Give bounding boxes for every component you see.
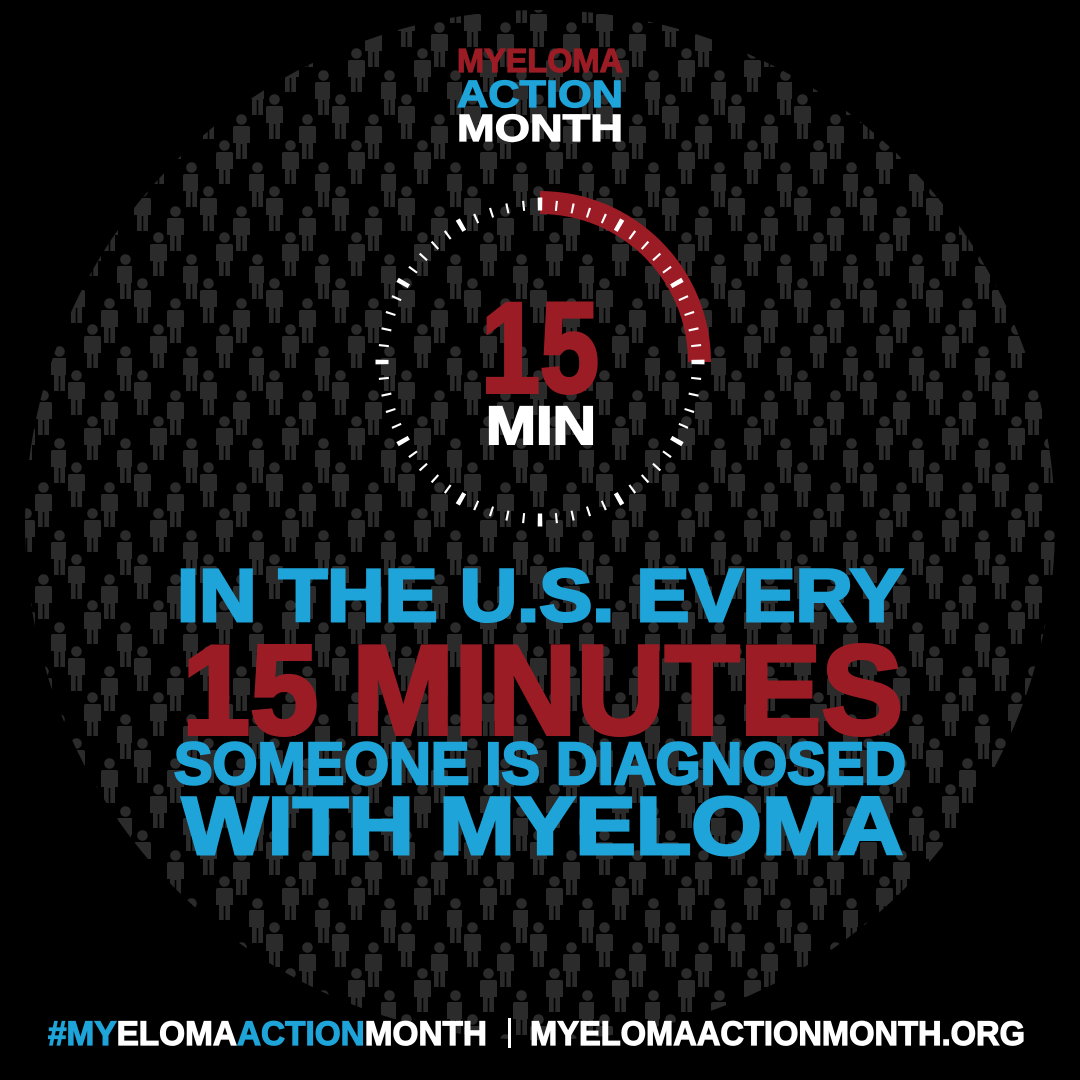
clock timer <box>382 191 711 520</box>
red arc: 15 minutes <box>540 191 711 362</box>
main statement: 15 MINUTES <box>182 619 903 761</box>
logo: myeloma action month <box>457 42 623 150</box>
logo: myeloma action month: MONTH <box>457 108 623 150</box>
main statement <box>174 554 906 872</box>
logo: myeloma action month: ACTION <box>457 74 623 116</box>
main statement: SOMEONE IS DIAGNOSED <box>174 731 906 797</box>
footer: hashtag and website <box>48 1015 1025 1053</box>
footer: hashtag and website: MYELOMAACTIONMONTH.ORG <box>530 1015 1025 1053</box>
15 number: 15 <box>481 277 599 420</box>
MIN label: MIN <box>486 396 596 456</box>
major ticks <box>382 204 698 520</box>
minor ticks <box>383 205 697 519</box>
main statement: IN THE U.S. EVERY <box>177 554 903 637</box>
footer: hashtag and website: #MYELOMAACTIONMONTH <box>48 1015 487 1053</box>
logo: myeloma action month: MYELOMA <box>457 42 623 79</box>
main statement: WITH MYELOMA <box>182 781 903 872</box>
